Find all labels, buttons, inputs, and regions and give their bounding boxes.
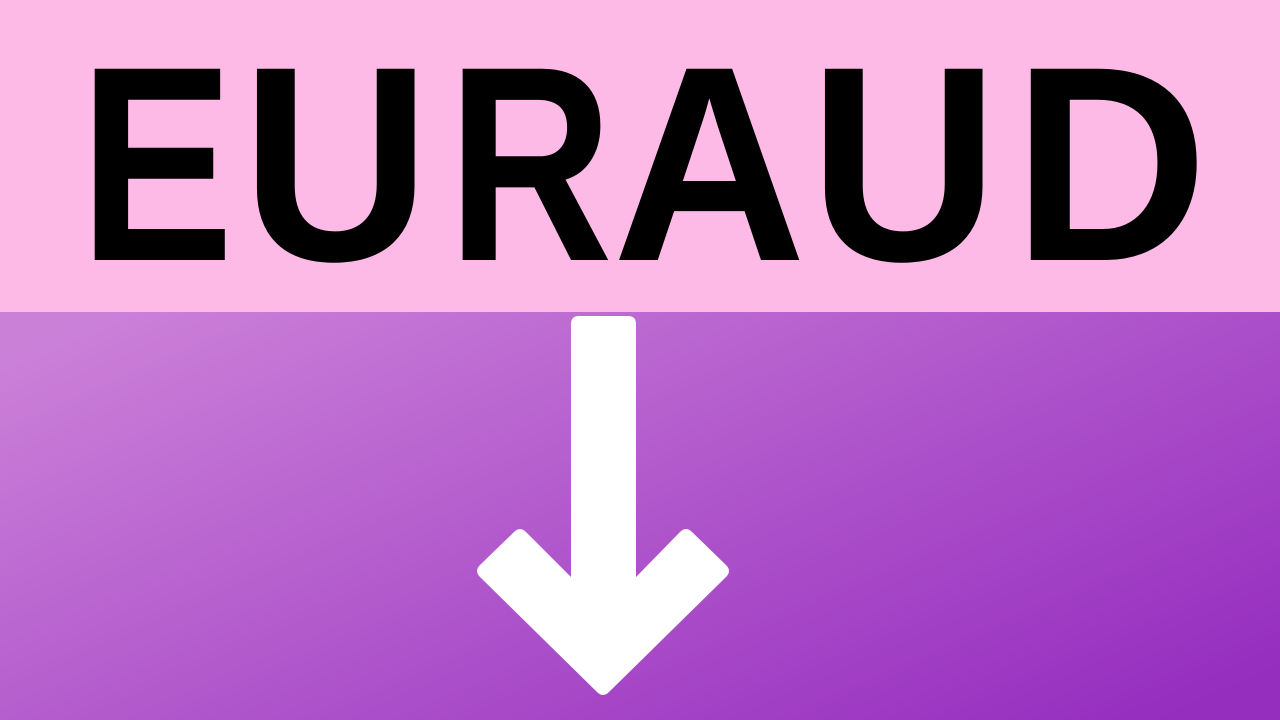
title: E <box>79 9 234 320</box>
title: A <box>612 9 806 319</box>
title: D <box>1013 10 1208 320</box>
title <box>79 9 1208 320</box>
title: U <box>809 9 999 320</box>
title: R <box>447 9 613 320</box>
panel: gradient band <box>0 312 1280 720</box>
panel: title band <box>0 0 1280 312</box>
title: U <box>241 9 431 320</box>
icon: down arrow <box>477 316 729 695</box>
